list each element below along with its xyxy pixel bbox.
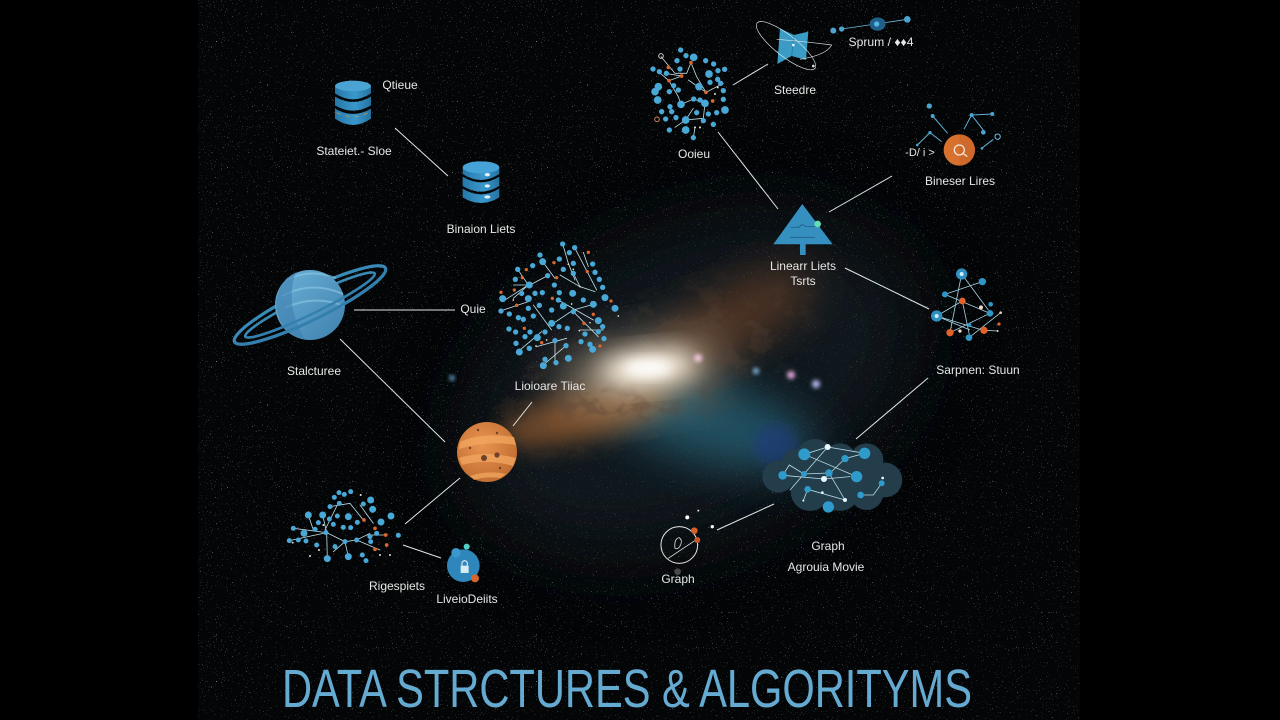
icon: ringed planet xyxy=(228,255,392,355)
label: Bineser Lires: Bineser Lires xyxy=(925,174,995,188)
label: LiveioDeiits: LiveioDeiits xyxy=(436,592,498,606)
label: Sprum: Sprum / ♦♦4 xyxy=(848,35,914,49)
network cluster: lower left xyxy=(289,492,398,561)
connector lines xyxy=(340,64,929,558)
label: Ooieu: Ooieu xyxy=(678,147,710,161)
label: Stalcturee: Stalcturee xyxy=(287,364,341,378)
icon: database Binaion Liets xyxy=(463,161,499,203)
label: Sarpnen Stuun: Sarpnen: Stuun xyxy=(936,363,1020,377)
label: Stateiet Sloe: Stateiet.- Sloe xyxy=(316,144,392,158)
label: Lioioare Tiiac: Lioioare Tiiac xyxy=(515,379,585,393)
label: Binaion Liets: Binaion Liets xyxy=(447,222,515,236)
label: arrow glyphs: -D/ i > xyxy=(905,147,935,159)
network cluster: cloud xyxy=(762,439,902,513)
label: Quie: Quie xyxy=(460,302,486,316)
icon: search orb with nodes xyxy=(916,103,1000,166)
infographic canvas xyxy=(198,0,1080,720)
label: Linearr Liets Tsrts: Linearr Liets xyxy=(770,259,836,273)
label: Agrouia Movie: Agrouia Movie xyxy=(788,560,865,574)
icon: node chain xyxy=(830,16,911,34)
label: Qtieue: Qtieue xyxy=(382,78,418,92)
icon: circled graph xyxy=(661,510,714,575)
label: Rigespiets: Rigespiets xyxy=(369,579,425,593)
label: Steedre: Steedre xyxy=(774,83,816,97)
network cluster: top xyxy=(653,50,725,138)
title: DATA STRCTURES & ALGORITYMS xyxy=(282,659,972,719)
icon: tree triangle xyxy=(773,204,833,255)
icon: folded panel with orbit xyxy=(751,15,832,77)
label: Graph small: Graph xyxy=(661,572,695,586)
icon: database Queue xyxy=(335,81,371,125)
central galaxy xyxy=(418,168,962,599)
icon: lock bubble xyxy=(447,544,480,582)
label: Graph: Graph xyxy=(811,539,845,553)
label: Linearr Liets Tsrts: Tsrts xyxy=(790,274,816,288)
label: Linearr Liets Tsrts xyxy=(770,259,836,288)
network cluster: right graph xyxy=(931,268,1002,341)
icon: orange planet xyxy=(457,422,517,482)
network cluster: central xyxy=(501,244,618,366)
